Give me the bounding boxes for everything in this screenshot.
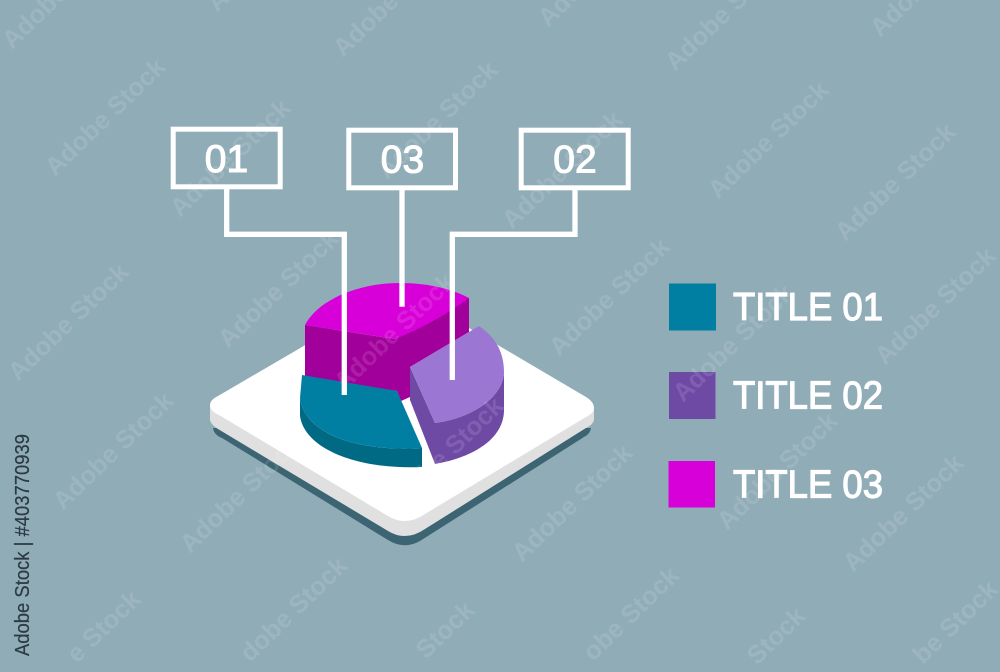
legend item 01 bbox=[669, 284, 883, 330]
label box 03: 03 bbox=[381, 138, 424, 182]
text: Adobe Stock bbox=[372, 55, 504, 184]
text: Adobe Stock bbox=[3, 257, 135, 386]
text: Adobe Stock bbox=[497, 105, 629, 234]
label box 01: 01 bbox=[205, 138, 248, 181]
text: Adobe Stock bbox=[175, 429, 307, 558]
connector 01 bbox=[227, 189, 344, 395]
platform top bbox=[210, 294, 594, 521]
platform base bbox=[210, 294, 594, 545]
text: Adobe Stock bbox=[703, 75, 835, 204]
slice: title 02 purple bbox=[410, 326, 504, 464]
text: Adobe Stock bbox=[712, 406, 844, 535]
text: Adobe Stock bbox=[213, 224, 345, 353]
connector 02 bbox=[452, 190, 575, 380]
text: Adobe Stock bbox=[40, 52, 172, 181]
label box 02 bbox=[521, 130, 628, 188]
label box 02: 02 bbox=[553, 138, 597, 182]
legend item 03 bbox=[668, 461, 883, 508]
label box 01 bbox=[173, 129, 280, 187]
text: Adobe Stock bbox=[830, 117, 962, 246]
slice: title 01 teal bbox=[300, 375, 422, 467]
legend bbox=[668, 284, 883, 508]
text: Stock bbox=[742, 601, 812, 670]
slice: title 03 magenta bbox=[305, 283, 469, 401]
text: Adobe Stock bbox=[165, 93, 297, 222]
legend item 02: TITLE 02 bbox=[733, 374, 883, 418]
text: dobe Stock bbox=[235, 551, 354, 667]
text: e Stock bbox=[62, 585, 147, 668]
connector 03 bbox=[399, 190, 405, 307]
label box 03 bbox=[349, 130, 456, 188]
text: Adobe Stock bbox=[544, 232, 676, 361]
legend item 03: TITLE 03 bbox=[733, 464, 883, 506]
text: Adobe Stock bbox=[329, 267, 461, 396]
text: Adobe Stock bbox=[378, 391, 510, 520]
pie chart bbox=[300, 283, 504, 467]
text: Stock bbox=[411, 595, 481, 664]
legend item 01: TITLE 01 bbox=[733, 286, 883, 329]
platform shadow bbox=[213, 428, 591, 545]
text: Adobe Stock bbox=[870, 241, 1000, 370]
text: Adobe Stock bbox=[507, 438, 639, 567]
stock id vertical text: Adobe Stock | #403770939 bbox=[12, 434, 34, 656]
platform side bbox=[210, 405, 594, 536]
text: Adobe Stock bbox=[48, 386, 180, 515]
text: Adobe Stock bbox=[838, 448, 970, 577]
legend item 02 bbox=[669, 372, 883, 419]
connector lines bbox=[227, 189, 575, 395]
text: Adobe Stock bbox=[668, 278, 800, 407]
text: obe Stock bbox=[578, 561, 685, 666]
